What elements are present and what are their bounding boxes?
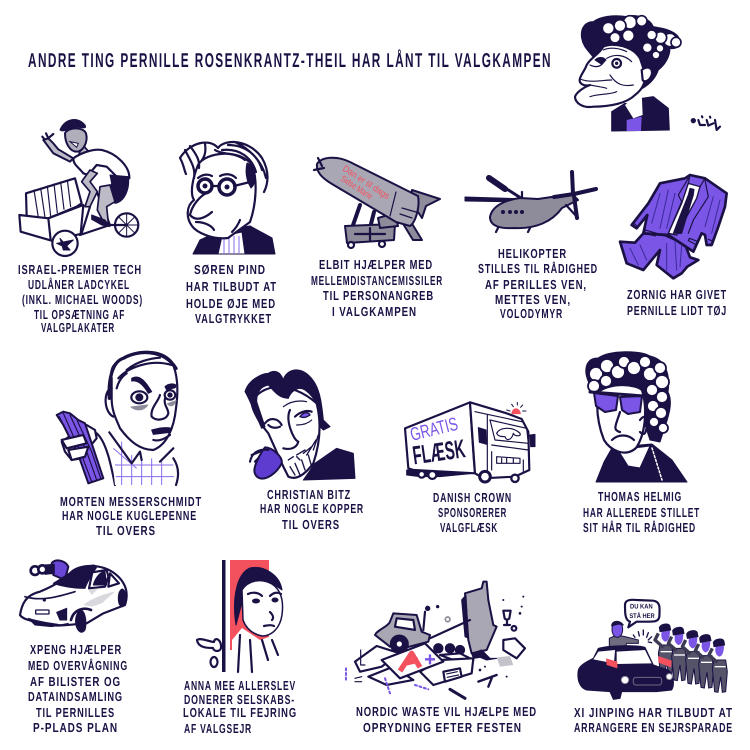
caption: Xpeng: MED OVERVÅGNING [28, 658, 128, 673]
signature [691, 116, 720, 130]
caption: Xpeng: AF BILISTER OG [30, 674, 121, 689]
caption: Anna Mee Allerslev: DONERER SELSKABS- [184, 692, 295, 707]
caption: Israel-Premier Tech: ISRAEL-PREMIER TECH [18, 262, 142, 277]
caption: Morten Messerschmidt: MORTEN MESSERSCHMIDT [60, 494, 202, 509]
caption: Xpeng: XPENG HJÆLPER [30, 642, 122, 657]
caption: Israel-Premier Tech: UDLÅNER LADCYKEL [28, 277, 130, 292]
caption: Thomas Helmig [583, 489, 700, 535]
caption: Thomas Helmig: SIT HÅR TIL RÅDIGHED [583, 520, 696, 535]
caption: Christian Bitz: HAR NOGLE KOPPER [260, 501, 364, 516]
icon: Morten with pens [57, 352, 178, 485]
caption: Søren Pind: HOLDE ØJE MED [186, 296, 276, 311]
caption: Helikopter: HELIKOPTER [498, 246, 567, 261]
icon: truck with GRATIS FLÆSK [405, 402, 535, 482]
panel: Xpeng car [20, 560, 128, 735]
icon: soldiers [655, 624, 727, 692]
icon: Xi in limousine [578, 621, 673, 699]
panel: Søren Pind [180, 142, 277, 326]
icon: missile on launcher: Dan er til dags [341, 163, 392, 201]
panel: Helikopter [465, 172, 598, 321]
panel: Xi Jinping [574, 600, 733, 735]
caption: Helikopter: STILLES TIL RÅDIGHED [478, 261, 598, 276]
caption: Anna Mee Allerslev [183, 678, 297, 736]
illustration: Pernille Rosenkrantz-Theil portrait [575, 16, 681, 131]
caption: Danish Crown: SPONSORERER [438, 505, 507, 520]
caption: Danish Crown: VALGFLÆSK [440, 520, 498, 535]
panel: Zornig suit [620, 175, 727, 318]
icon: truck with GRATIS FLÆSK: FLÆSK [411, 434, 467, 470]
speech bubble: DU KAN [630, 603, 653, 610]
caption: Xi Jinping [574, 705, 733, 735]
caption: Søren Pind: VALGTRYKKET [195, 311, 272, 326]
caption: Søren Pind: HAR TILBUDT AT [186, 279, 277, 294]
caption: Morten Messerschmidt: TIL OVERS [96, 523, 156, 538]
icon: door with woman [197, 560, 283, 672]
caption: Xpeng: P-PLADS PLAN [33, 720, 118, 735]
caption: Anna Mee Allerslev: AF VALGSEJR [184, 721, 252, 736]
panel: Nordic Waste [346, 582, 537, 735]
icon: Xpeng car with spy [20, 560, 127, 632]
caption: Elbit: ELBIT HJÆLPER MED [319, 257, 433, 272]
icon: truck with GRATIS FLÆSK: GRATIS [408, 413, 460, 445]
caption: Nordic Waste: NORDIC WASTE VIL HJÆLPE MED [356, 704, 537, 719]
panel: Elbit missile [311, 158, 443, 319]
caption: Israel-Premier Tech: TIL OPSÆTNING AF [34, 307, 125, 322]
icon: Christian Bitz drinking [245, 370, 355, 480]
caption: Christian Bitz: TIL OVERS [282, 517, 340, 532]
panel: Danish Crown truck [405, 402, 535, 535]
caption: Danish Crown [433, 490, 512, 535]
icon: Søren Pind portrait [180, 142, 275, 254]
caption: Anna Mee Allerslev: ANNA MEE ALLERSLEV [184, 678, 296, 693]
caption: Anna Mee Allerslev: LOKALE TIL FEJRING [183, 705, 297, 720]
panel: Anna Mee Allerslev [183, 560, 297, 736]
icon: helicopter [465, 172, 596, 232]
caption: Elbit [311, 257, 443, 319]
caption: Helikopter: METTES VEN, [495, 292, 571, 307]
caption: Israel-Premier Tech: (INKL. MICHAEL WOODS) [22, 292, 143, 307]
caption: Søren Pind: SØREN PIND [194, 262, 266, 277]
caption: Nordic Waste: OPRYDNING EFTER FESTEN [363, 720, 522, 735]
caption: Israel-Premier Tech [18, 262, 143, 335]
caption: Helikopter [478, 246, 598, 321]
panel: Israel-Premier Tech [18, 120, 143, 335]
caption: Israel-Premier Tech: VALGPLAKATER [41, 320, 115, 335]
caption: Elbit: I VALGKAMPEN [332, 304, 417, 319]
caption: Morten Messerschmidt: HAR NOGLE KUGLEPENNE [62, 508, 197, 523]
caption: Christian Bitz [260, 487, 364, 532]
speech bubble: STÅ HER [629, 612, 655, 620]
icon: rubble with bulldozer and poster [346, 582, 525, 698]
caption: Xpeng: TIL PERNILLES [36, 705, 115, 720]
caption: Helikopter: AF PERILLES VEN, [485, 277, 587, 292]
caption: Morten Messerschmidt [60, 494, 202, 538]
caption: Søren Pind [186, 262, 277, 326]
icon: missile on launcher: Sidse Marie [339, 173, 375, 201]
icon: cyclist on cargo bike [19, 120, 138, 256]
caption: Xpeng: DATAINDSAMLING [28, 689, 123, 704]
icon: Thomas Helmig portrait [586, 352, 687, 482]
caption: Zornig [627, 287, 727, 318]
caption: Elbit: TIL PERSONANGREB [323, 288, 434, 303]
caption: Nordic Waste [356, 704, 537, 735]
icon: purple suit [620, 175, 727, 278]
caption: Danish Crown: DANISH CROWN [433, 490, 512, 505]
icon: missile on launcher [314, 158, 440, 248]
speech bubble [625, 600, 660, 627]
caption: Thomas Helmig: THOMAS HELMIG [598, 489, 682, 504]
panel: Christian Bitz [245, 370, 364, 532]
panel: Thomas Helmig [583, 352, 700, 535]
caption: Helikopter: VOLODYMYR [500, 306, 563, 321]
caption: Elbit: MELLEMDISTANCEMISSILER [311, 273, 443, 288]
caption: Xpeng [28, 642, 128, 735]
caption: Christian Bitz: CHRISTIAN BITZ [267, 487, 351, 502]
panel: Morten Messerschmidt [57, 352, 202, 538]
